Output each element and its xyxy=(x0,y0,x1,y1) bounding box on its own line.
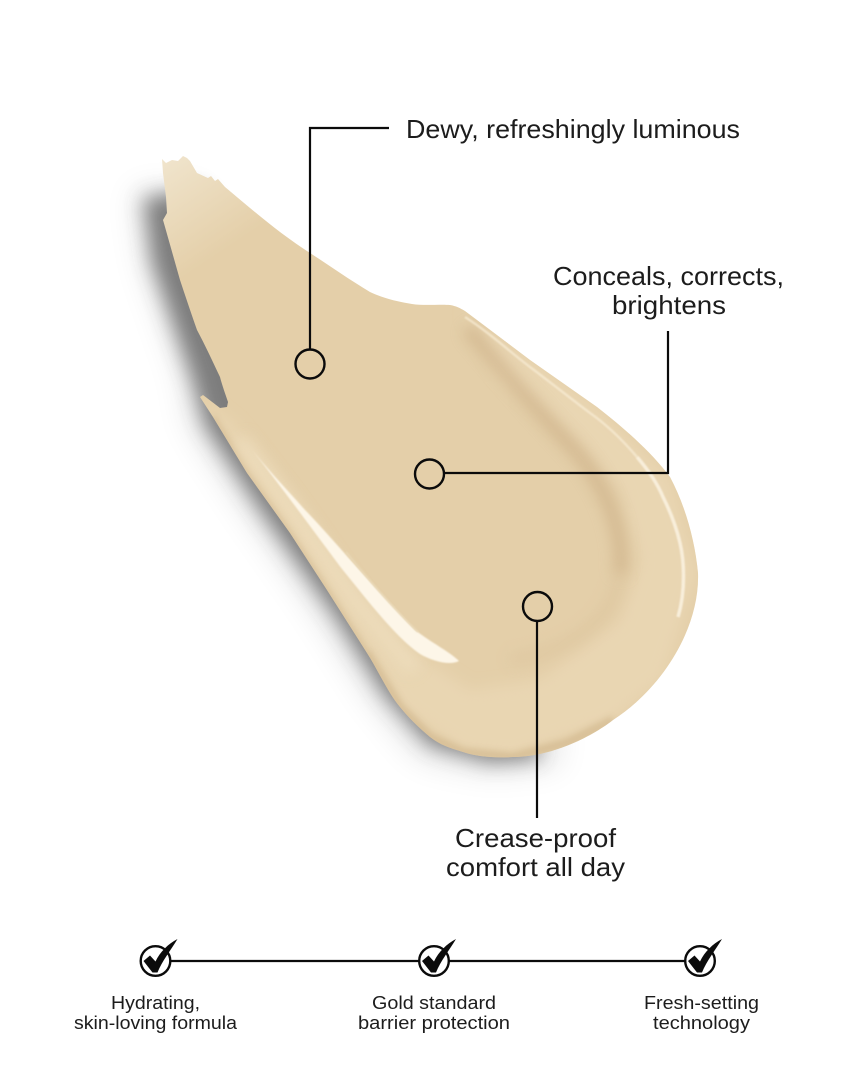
leader line xyxy=(310,128,389,350)
gloss highlight: right xyxy=(465,317,637,457)
benefit: hydrating: skin-loving formula xyxy=(74,1013,238,1033)
icon: check xyxy=(141,939,178,976)
benefit: fresh-setting: technology xyxy=(653,1013,750,1033)
text: Fresh-setting xyxy=(644,993,759,1013)
benefit: barrier: barrier protection xyxy=(358,1013,510,1033)
benefit: fresh-setting xyxy=(644,939,759,1033)
icon: check xyxy=(685,939,722,976)
marker xyxy=(415,460,444,488)
gloss highlight: left xyxy=(252,450,459,663)
swatch body xyxy=(162,156,698,757)
callout: conceals, corrects, brightens xyxy=(415,261,784,488)
label: Conceals, corrects, xyxy=(553,261,784,291)
connecting line xyxy=(170,960,685,962)
foundation swatch with shadow xyxy=(134,156,698,772)
benefit: barrier xyxy=(358,939,510,1033)
leader line xyxy=(444,331,668,473)
marker xyxy=(296,350,324,378)
text: Hydrating, xyxy=(111,993,200,1013)
callout: conceals, corrects, brightens: brightens xyxy=(612,290,726,320)
callout: dewy, refreshingly luminous xyxy=(296,114,740,378)
text: Gold standard xyxy=(372,993,496,1013)
icon: check xyxy=(419,939,456,976)
callout: crease-proof comfort xyxy=(446,592,625,882)
callout: crease-proof comfort: comfort all day xyxy=(446,852,625,882)
swatch shadow xyxy=(134,190,560,772)
marker xyxy=(523,592,552,621)
label: Dewy, refreshingly luminous xyxy=(406,114,740,144)
swatch shading and rims xyxy=(200,311,698,757)
benefit: hydrating xyxy=(74,939,238,1033)
leader line xyxy=(536,621,538,818)
label: Crease-proof xyxy=(455,823,617,853)
benefits row xyxy=(74,939,759,1033)
